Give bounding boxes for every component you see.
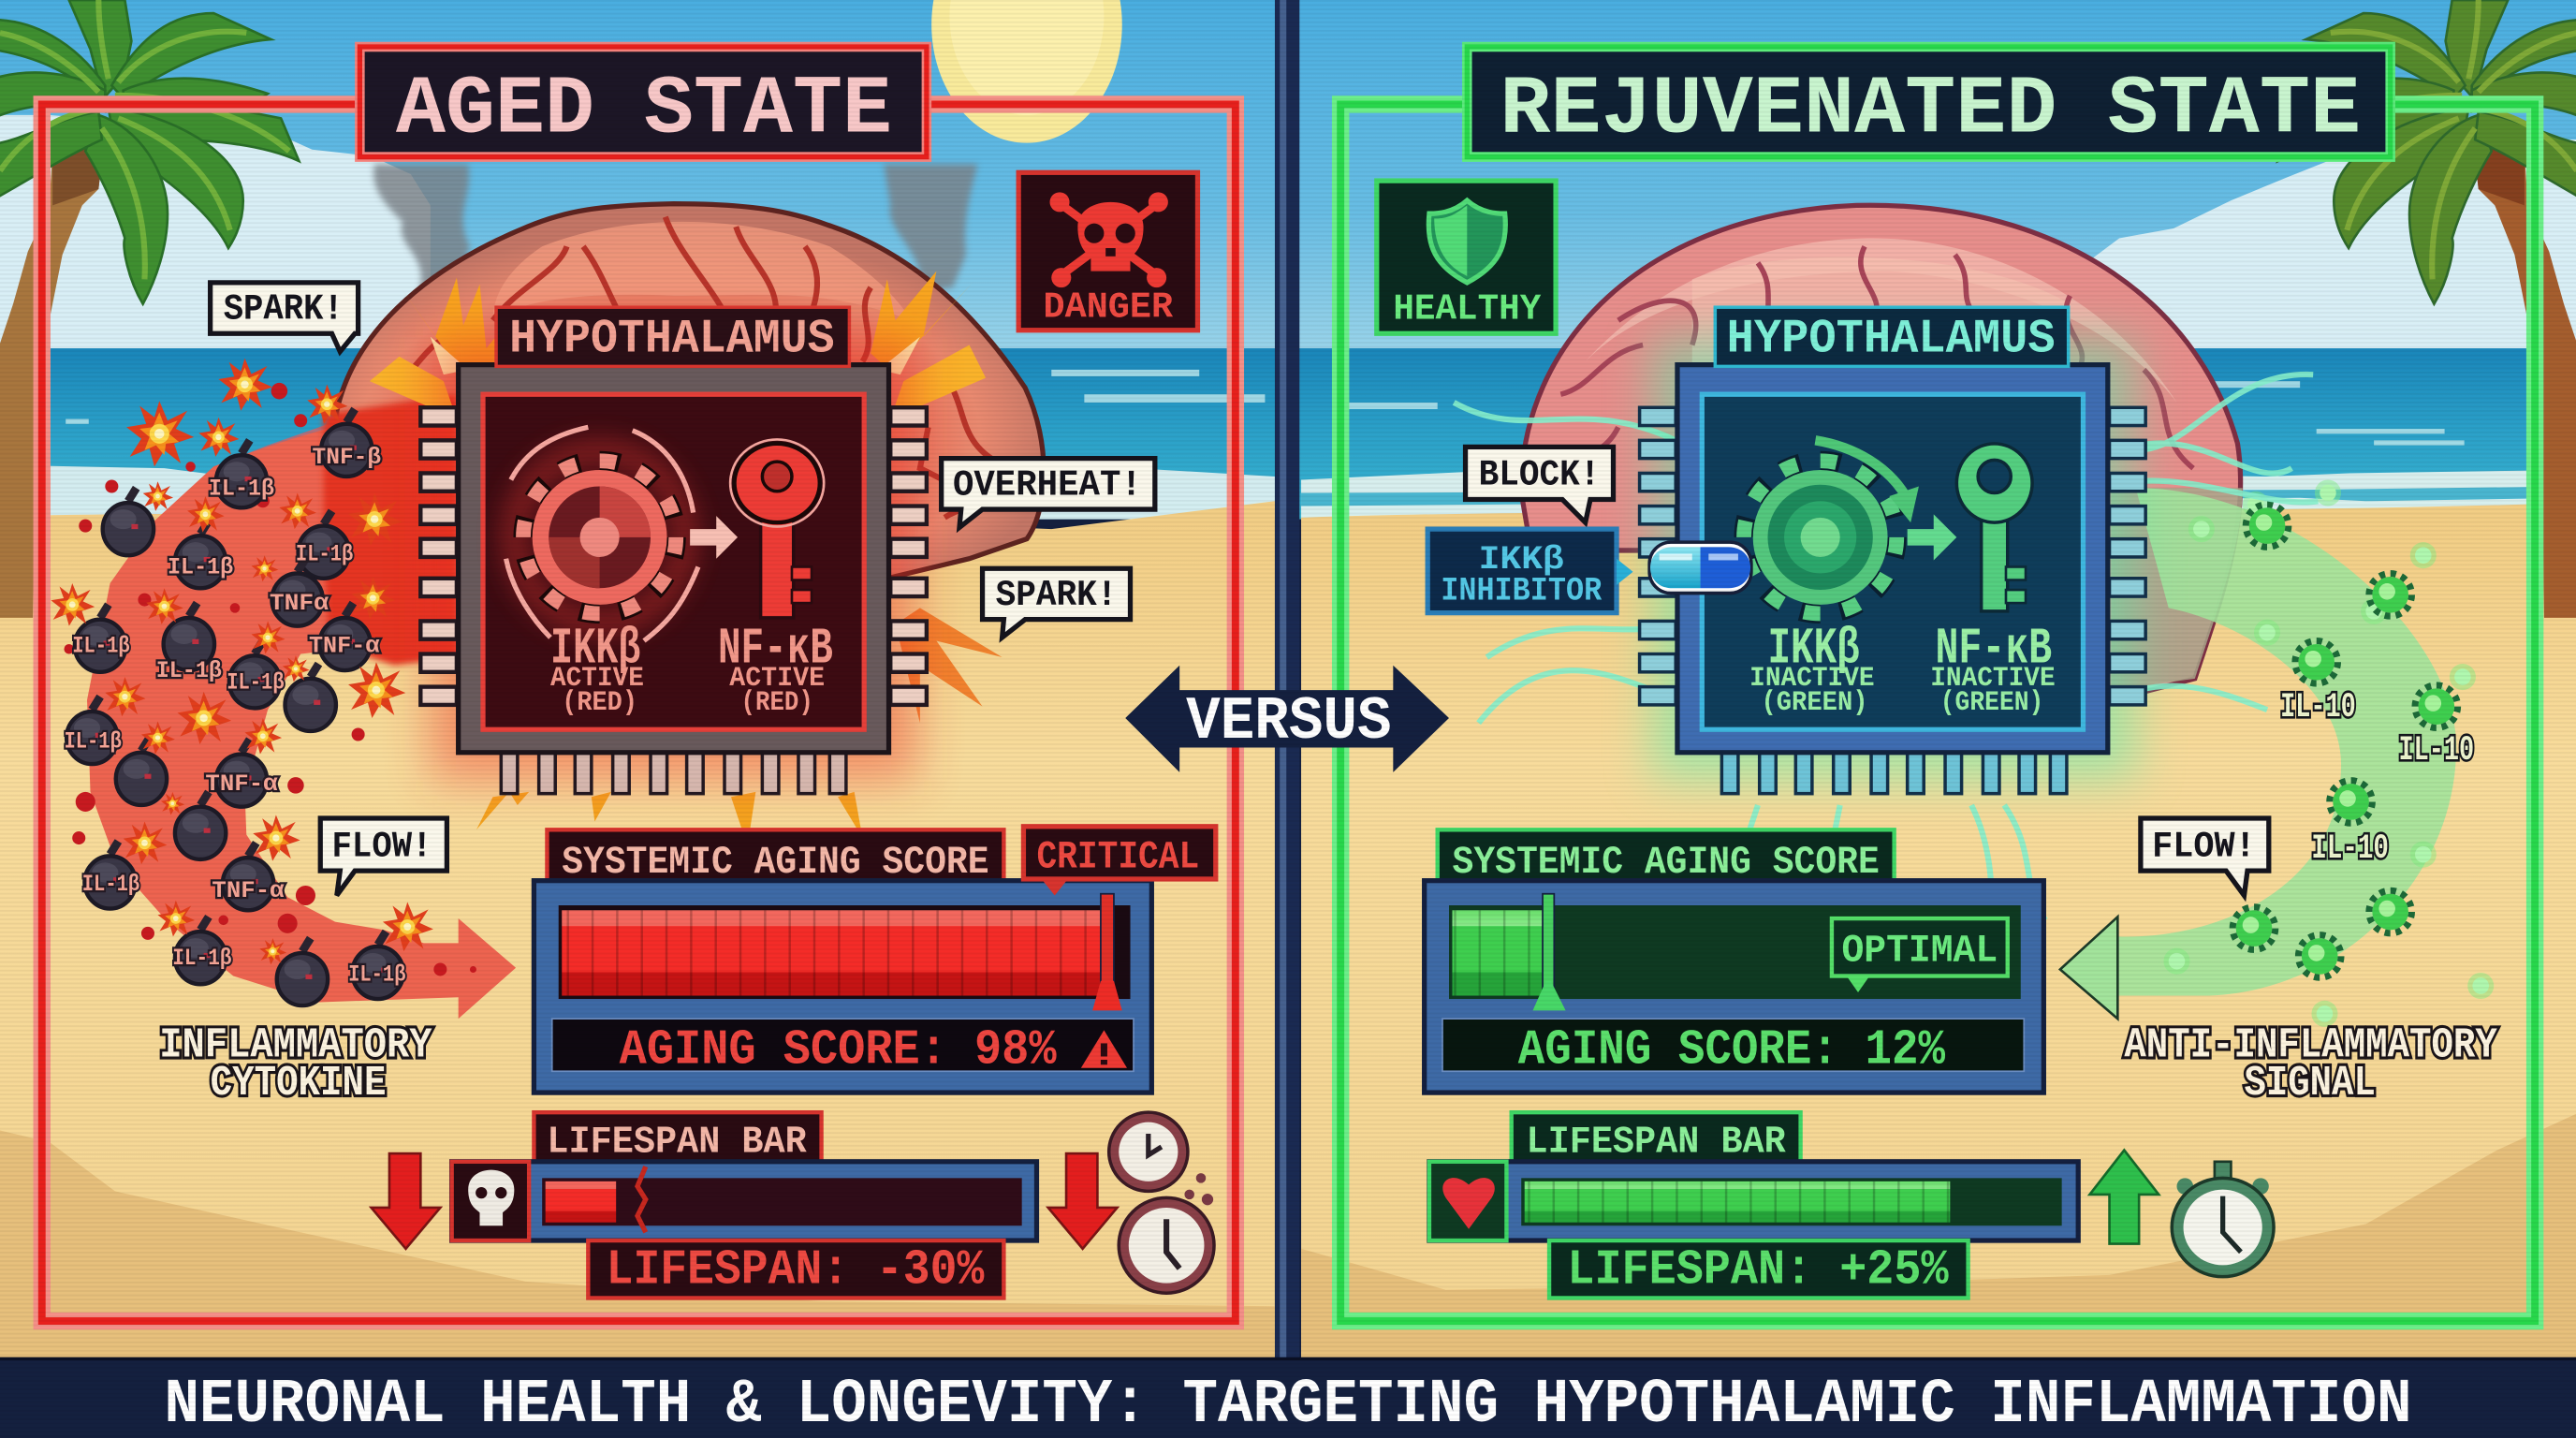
cytokine bombs: TNF-α: [205, 772, 278, 798]
bar fill green: [1525, 1181, 1950, 1223]
label: IKKβ inhibitor: INHIBITOR: [1441, 573, 1603, 610]
chip bottom pins right panel: [1721, 753, 2067, 794]
panel: aging score aged: [534, 829, 1151, 1093]
bar track green: [1521, 1178, 2062, 1225]
tab: lifespan bar green: LIFESPAN BAR: [1526, 1121, 1787, 1164]
speech bubble: overheat: OVERHEAT!: [953, 464, 1142, 506]
tag: critical: CRITICAL: [1036, 835, 1199, 880]
label: inflammatory cytokine: INFLAMMATORY: [159, 1020, 432, 1069]
panel: lifespan aged: [452, 1112, 1036, 1299]
cytokine bombs: TNFα: [270, 592, 329, 617]
tab: systemic aging score green: SYSTEMIC AGING SCORE: [1453, 840, 1880, 885]
bar body green: [1429, 1162, 2078, 1240]
frame: aged panel: [42, 104, 1236, 1321]
icon: shield: [1428, 200, 1505, 283]
healing wisps around rejuvenated chip: [1454, 374, 2318, 920]
chip body right panel: [1677, 365, 2108, 753]
label: inflammatory cytokine: CYTOKINE: [211, 1059, 386, 1108]
chip labels aged: ACTIVE: [729, 662, 825, 694]
chip labels aged: [550, 621, 833, 718]
title: aged state: AGED STATE: [396, 64, 892, 156]
tag: critical: [1023, 827, 1216, 895]
label: IKKβ inhibitor: IKKβ: [1479, 541, 1564, 579]
versus double arrow: VERSUS: [1186, 688, 1392, 756]
cytokine bombs: IL-1β: [64, 730, 122, 756]
gauge body: [534, 881, 1151, 1093]
icon: stopwatch: [2172, 1162, 2274, 1277]
speech bubble: flow aged: FLOW!: [332, 826, 432, 867]
chip screen: [483, 394, 864, 729]
cytokine bombs: IL-1β: [168, 556, 233, 581]
chip labels rejuvenated: INACTIVE: [1749, 662, 1875, 694]
cytokine bombs: IL-1β: [82, 873, 139, 898]
cytokine bombs: IL-1β: [209, 477, 274, 502]
IL-10 particles: IL-10: [2398, 731, 2474, 770]
chip body: [459, 365, 889, 753]
bar fill 98 percent: [562, 910, 1104, 996]
badge: danger: DANGER: [1043, 287, 1174, 329]
chip labels rejuvenated: (GREEN): [1940, 686, 2043, 718]
brain: aged: [337, 204, 1044, 579]
chip labels aged: NF-κB: [718, 621, 833, 678]
cytokine bombs: IL-1β: [72, 635, 130, 660]
IL-10 particles: [2232, 505, 2474, 977]
icon: inhibitor pill: [1649, 542, 1751, 594]
label: hypothalamus aged: HYPOTHALAMUS: [509, 314, 835, 367]
panel: aging score rejuvenated: [1425, 829, 2043, 1093]
badge: healthy: HEALTHY: [1393, 288, 1542, 330]
label: IKKβ inhibitor: [1427, 529, 1633, 613]
versus double arrow: [1125, 666, 1449, 772]
cytokine bombs: TNF-α: [309, 635, 380, 660]
key: NF-κB active: [730, 439, 824, 618]
speech bubble: flow rejuvenated: FLOW!: [2152, 826, 2256, 867]
chip screen right panel: [1702, 394, 2083, 729]
label: inflammatory cytokine: [159, 1020, 432, 1108]
arrow: down left: [372, 1153, 440, 1249]
score value: AGING SCORE: 98%: [620, 1022, 1057, 1078]
bar fill 12 percent: [1453, 910, 1547, 996]
cytokine bombs: TNF-β: [312, 446, 381, 471]
cytokine bombs: IL-1β: [296, 542, 354, 567]
chip labels rejuvenated: INACTIVE: [1930, 662, 2056, 694]
brain: rejuvenated: [1521, 205, 2243, 698]
tag: optimal: [1832, 918, 2008, 992]
chip labels aged: IKKβ: [550, 621, 640, 678]
speech bubble: spark right: [983, 568, 1131, 638]
speech bubble: spark right: SPARK!: [996, 575, 1117, 616]
tab: lifespan bar: LIFESPAN BAR: [547, 1121, 807, 1164]
title: rejuvenated state: REJUVENATED STATE: [1500, 64, 2361, 156]
chip labels aged: (RED): [562, 686, 637, 718]
chip: aged hypothalamus: [420, 337, 927, 794]
bar track: [542, 1178, 1022, 1225]
gear: IKKβ active: [506, 427, 698, 640]
speech bubble: spark top: SPARK!: [224, 288, 344, 330]
divider between panels: [1275, 0, 1299, 1364]
score value green: AGING SCORE: 12%: [1518, 1022, 1945, 1078]
arrow: up: [2089, 1151, 2159, 1244]
cytokine bombs: IL-1β: [348, 963, 406, 989]
gauge body green: [1425, 881, 2043, 1093]
chip labels aged: ACTIVE: [550, 662, 644, 694]
needle: [1092, 894, 1122, 1010]
cytokine bombs: IL-1β: [172, 946, 232, 972]
chip side pins left: [420, 407, 927, 705]
anti-inflammatory signal stream: [2060, 479, 2494, 1027]
badge: danger: [1018, 172, 1197, 330]
label: anti-inflammatory signal: SIGNAL: [2244, 1059, 2376, 1108]
chip: rejuvenated hypothalamus: [1640, 337, 2145, 794]
aged sparks around chip: [370, 271, 1003, 846]
explosions: [51, 359, 433, 964]
label: hypothalamus rejuvenated: HYPOTHALAMUS: [1727, 314, 2056, 367]
bar track: [559, 905, 1131, 999]
lifespan value green: LIFESPAN: +25%: [1567, 1242, 1949, 1299]
smoke above aged brain: [373, 165, 977, 292]
badge: healthy: [1377, 181, 1556, 333]
icon: heart: [1429, 1162, 1506, 1240]
bar fill: [546, 1181, 616, 1223]
arrow: down right: [1048, 1153, 1117, 1249]
speech bubble: flow rejuvenated: [2141, 818, 2269, 895]
panel: lifespan rejuvenated: [1429, 1112, 2078, 1299]
inflammatory cytokine stream: [64, 383, 516, 1019]
chip side pins right panel: [1640, 407, 2145, 705]
bar body: [452, 1162, 1036, 1240]
cytokine bombs: IL-1β: [156, 659, 222, 684]
key: NF-κB inactive: [1956, 444, 2032, 611]
speech bubble: overheat: [942, 459, 1155, 527]
label: anti-inflammatory signal: [2124, 1020, 2497, 1108]
speech bubble: spark top: [211, 283, 359, 352]
label: anti-inflammatory signal: ANTI-INFLAMMATORY: [2124, 1020, 2497, 1069]
icon: small clock: [1109, 1112, 1188, 1191]
IL-10 particles: IL-10: [2280, 688, 2356, 727]
needle green: [1533, 894, 1566, 1010]
gear: IKKβ inactive: [1744, 440, 1919, 614]
arrow: gear to key: [690, 516, 738, 559]
chip labels aged: (RED): [741, 686, 813, 718]
chip labels rejuvenated: (GREEN): [1761, 686, 1868, 718]
bar track green: [1449, 905, 2021, 999]
arrow: gear to key green: [1908, 514, 1956, 560]
palm tree right: [2278, 0, 2576, 618]
speech bubble: block: BLOCK!: [1479, 455, 1600, 496]
chip labels rejuvenated: NF-κB: [1936, 621, 2052, 678]
tab: systemic aging score: SYSTEMIC AGING SCORE: [562, 840, 989, 885]
crack: [637, 1167, 646, 1232]
chip labels rejuvenated: IKKβ: [1767, 621, 1860, 678]
cytokine bombs: [64, 409, 406, 1005]
icon: large broken clock: [1119, 1173, 1214, 1293]
speech bubble: flow aged: [320, 818, 446, 895]
frame: rejuvenated panel: [1340, 104, 2535, 1321]
cytokine bombs: TNF-α: [212, 879, 285, 904]
icon: skull and crossbones: [1050, 192, 1168, 287]
IL-10 particles: IL-10: [2311, 829, 2389, 869]
chip labels rejuvenated: [1749, 621, 2056, 718]
icon: skull: [452, 1162, 529, 1240]
speech bubble: block: [1466, 447, 1614, 522]
cytokine bombs: IL-1β: [227, 670, 285, 696]
palm tree left: [0, 0, 299, 618]
lifespan value: LIFESPAN: -30%: [607, 1242, 985, 1299]
chip bottom pins: [501, 753, 846, 794]
tag: optimal: OPTIMAL: [1841, 929, 1998, 974]
